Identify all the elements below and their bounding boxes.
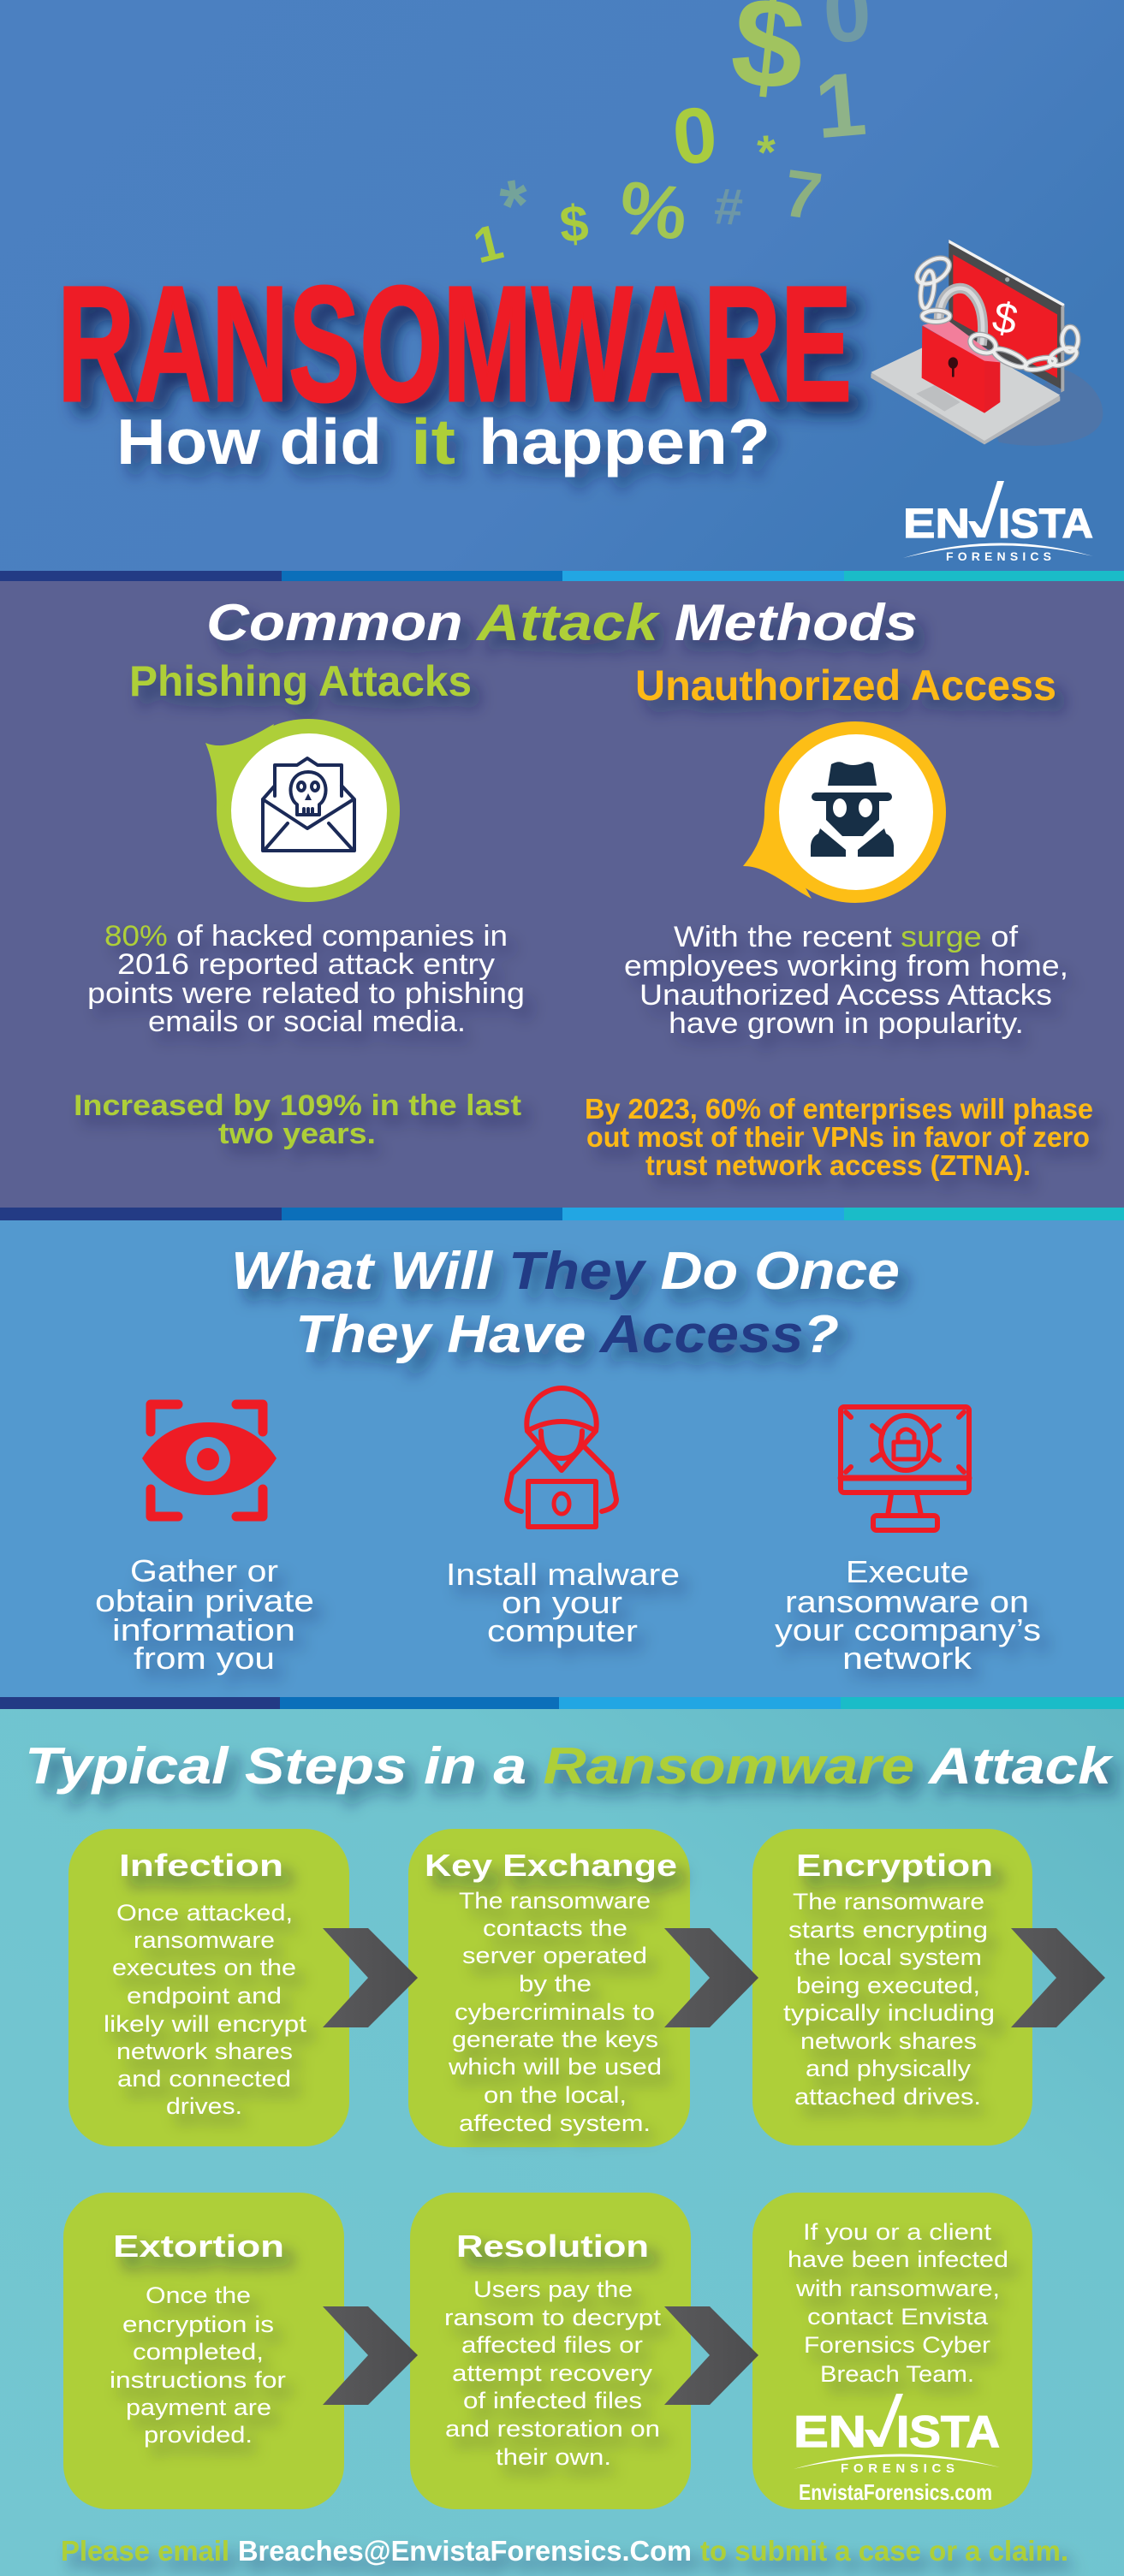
logo: Envista Forensics — [903, 481, 1093, 563]
callout: phishing growth — [74, 1089, 521, 1150]
text: gather information: information — [112, 1612, 295, 1647]
text: install malware — [446, 1557, 680, 1648]
card text: executes on the — [112, 1955, 296, 1980]
card text: Once the — [146, 2282, 251, 2308]
card title: Encryption — [796, 1848, 993, 1883]
panel: typical steps — [0, 1709, 1124, 2576]
card text: Users pay the — [473, 2276, 633, 2302]
card text: of infected files — [463, 2388, 642, 2413]
text: phishing statistic: points were related to phishing — [87, 977, 525, 1010]
logo: Envista Forensics — [794, 2394, 1000, 2476]
card text: by the — [519, 1971, 592, 1997]
text: install malware: on your — [502, 1585, 622, 1620]
text: unauthorized access trend: Unauthorized Access Attacks — [639, 979, 1052, 1012]
text: execute ransomware: your ccompany’s — [775, 1612, 1041, 1647]
falling money symbols: 1 — [812, 54, 870, 157]
card title: Key Exchange — [425, 1848, 677, 1883]
card text: Once attacked, — [116, 1900, 293, 1926]
card text: network shares — [800, 2028, 977, 2054]
logo: Envista Forensics: FORENSICS — [841, 2461, 955, 2476]
callout: VPN forecast: By 2023, 60% of enterprises will phase — [585, 1093, 1093, 1125]
card text: completed, — [133, 2339, 264, 2365]
card text: Forensics Cyber — [804, 2332, 990, 2358]
arrow: key exchange to encryption — [664, 1928, 758, 2027]
card: Key Exchange — [408, 1829, 690, 2147]
card: Resolution — [410, 2193, 691, 2509]
card text: ransom to decrypt — [444, 2305, 662, 2330]
card text: affected system. — [459, 2110, 651, 2136]
text: execute ransomware: ransomware on — [785, 1584, 1029, 1619]
card text: server operated — [462, 1943, 647, 1968]
footer: contact line: to submit a case or a claim. — [700, 2535, 1068, 2567]
callout: VPN forecast: out most of their VPNs in favor of zero — [586, 1121, 1090, 1153]
logo: Envista Forensics: EN — [903, 502, 970, 547]
logo: Envista Forensics: ISTA — [896, 2407, 1000, 2457]
card text: which will be used — [448, 2054, 662, 2080]
subheading: Unauthorized Access: Unauthorized Access — [635, 662, 1056, 709]
card title: Infection — [119, 1848, 283, 1883]
icon: chained padlock on laptop: $ — [989, 292, 1022, 344]
card text: If you or a client — [803, 2219, 992, 2245]
card: Extortion — [63, 2193, 344, 2509]
card text: instructions for — [110, 2367, 286, 2393]
heading: Common Attack Methods: Common Attack Methods — [206, 594, 918, 651]
falling money symbols: $ — [558, 194, 591, 253]
card text: network shares — [116, 2039, 293, 2064]
falling money symbols: 7 — [779, 155, 826, 234]
card text: likely will encrypt — [104, 2011, 307, 2037]
subtitle: How did it happen?: happen? — [479, 406, 770, 478]
panel: what will they do — [0, 1220, 1124, 1697]
card title: Resolution — [456, 2229, 649, 2264]
card text: ransomware — [134, 1927, 275, 1953]
card text: and restoration on — [445, 2416, 660, 2442]
card: Encryption — [752, 1829, 1032, 2146]
text: unauthorized access trend: employees working from home, — [624, 950, 1068, 982]
text: phishing statistic — [87, 920, 525, 1038]
card text — [104, 1900, 307, 2119]
card text: on the local, — [484, 2082, 627, 2108]
card: contact Envista — [752, 2193, 1032, 2509]
card text: typically including — [783, 2000, 995, 2026]
text: unauthorized access trend: With the recent surge of — [674, 921, 1019, 953]
callout: phishing growth: Increased by 109% in the last — [74, 1089, 521, 1122]
falling money symbols: * — [495, 163, 537, 247]
text: unauthorized access trend: have grown in popularity. — [669, 1007, 1024, 1040]
text: execute ransomware — [775, 1554, 1041, 1676]
text: execute ransomware: Execute — [846, 1554, 969, 1589]
card text: encryption is — [122, 2312, 274, 2337]
text: install malware: Install malware — [446, 1557, 680, 1592]
card text: contacts the — [483, 1915, 627, 1941]
card text: attempt recovery — [452, 2360, 653, 2386]
falling money symbols — [468, 0, 874, 275]
heading: What Will They Do Once They Have Access?: What Will They Do Once — [231, 1242, 900, 1301]
icon: chained padlock on laptop — [871, 240, 1103, 446]
card: Infection — [68, 1829, 349, 2146]
arrow: resolution to contact — [664, 2306, 758, 2405]
icon: locked monitor — [841, 1407, 969, 1530]
card text — [444, 2276, 662, 2470]
subtitle: How did it happen?: How did — [116, 406, 382, 478]
subtitle: How did it happen? — [116, 406, 770, 478]
card text: Breach Team. — [820, 2361, 974, 2387]
arrow: infection to key exchange — [323, 1928, 418, 2027]
card text: cybercriminals to — [455, 1999, 655, 2025]
text: execute ransomware: network — [842, 1641, 972, 1676]
text: gather information — [95, 1553, 314, 1676]
arrow: extortion to resolution — [323, 2306, 418, 2405]
falling money symbols: % — [616, 164, 691, 256]
panel: hero header — [0, 0, 1124, 571]
card text: attached drives. — [794, 2084, 981, 2110]
text: install malware: computer — [487, 1613, 638, 1648]
heading: Typical Steps in a Ransomware Attack: Typical Steps in a Ransomware Attack — [25, 1737, 1114, 1795]
text: phishing statistic: 80% of hacked companies in — [104, 920, 508, 953]
card text: endpoint and — [127, 1983, 282, 2009]
logo: Envista Forensics: ISTA — [998, 502, 1093, 547]
text: phishing statistic: emails or social media. — [148, 1006, 466, 1038]
card text: provided. — [144, 2422, 253, 2448]
icon: spy in bubble — [743, 721, 946, 903]
card text: starts encrypting — [788, 1917, 988, 1943]
falling money symbols: # — [713, 177, 744, 236]
subtitle: How did it happen?: it — [411, 406, 455, 478]
text: gather information: obtain private — [95, 1583, 314, 1618]
footer: contact line: Please email — [61, 2535, 229, 2567]
card text: payment are — [126, 2395, 271, 2420]
card text: being executed, — [796, 1973, 980, 1998]
card text: the local system — [794, 1944, 982, 1970]
icon: hacker at laptop — [507, 1388, 616, 1527]
card text: contact Envista — [807, 2304, 989, 2330]
arrow: encryption to extortion — [1011, 1928, 1105, 2027]
card text — [448, 1888, 662, 2136]
callout: phishing growth: two years. — [218, 1118, 376, 1150]
website link: EnvistaForensics.com — [799, 2479, 992, 2505]
text: unauthorized access trend — [624, 921, 1068, 1040]
card text: The ransomware — [459, 1888, 651, 1914]
card text — [110, 2282, 286, 2448]
footer: contact line — [61, 2535, 1068, 2567]
card text: and connected — [117, 2066, 291, 2092]
falling money symbols: 1 — [468, 214, 508, 275]
card text: with ransomware, — [795, 2276, 1000, 2301]
card text — [783, 1889, 995, 2110]
card text: The ransomware — [793, 1889, 984, 1914]
card text: drives. — [166, 2093, 242, 2119]
card text: have been infected — [788, 2247, 1008, 2272]
text: gather information: Gather or — [130, 1553, 278, 1588]
text: phishing statistic: 2016 reported attack entry — [117, 948, 495, 981]
logo: Envista Forensics: EN — [794, 2407, 866, 2457]
footer: contact line: Breaches@EnvistaForensics.Com — [238, 2535, 692, 2567]
panel: common attack methods — [0, 581, 1124, 1208]
card text — [788, 2219, 1008, 2387]
card text: affected files or — [461, 2332, 643, 2358]
card text: their own. — [496, 2444, 611, 2470]
callout: VPN forecast — [585, 1093, 1093, 1181]
logo: Envista Forensics: FORENSICS — [946, 549, 1051, 563]
falling money symbols: * — [756, 124, 778, 180]
falling money symbols: 0 — [669, 91, 722, 182]
card text: generate the keys — [452, 2027, 658, 2052]
subheading: Phishing Attacks: Phishing Attacks — [129, 657, 472, 705]
callout: VPN forecast: trust network access (ZTNA). — [645, 1149, 1031, 1181]
card text: and physically — [806, 2056, 972, 2081]
heading: What Will They Do Once They Have Access?: They Have Access ? — [295, 1305, 839, 1364]
icon: phishing email with skull — [205, 719, 400, 902]
icon: eye scan — [142, 1404, 277, 1517]
card title: Extortion — [113, 2229, 284, 2264]
heading: What Will They Do Once They Have Access? — [231, 1242, 900, 1364]
text: gather information: from you — [134, 1641, 275, 1676]
